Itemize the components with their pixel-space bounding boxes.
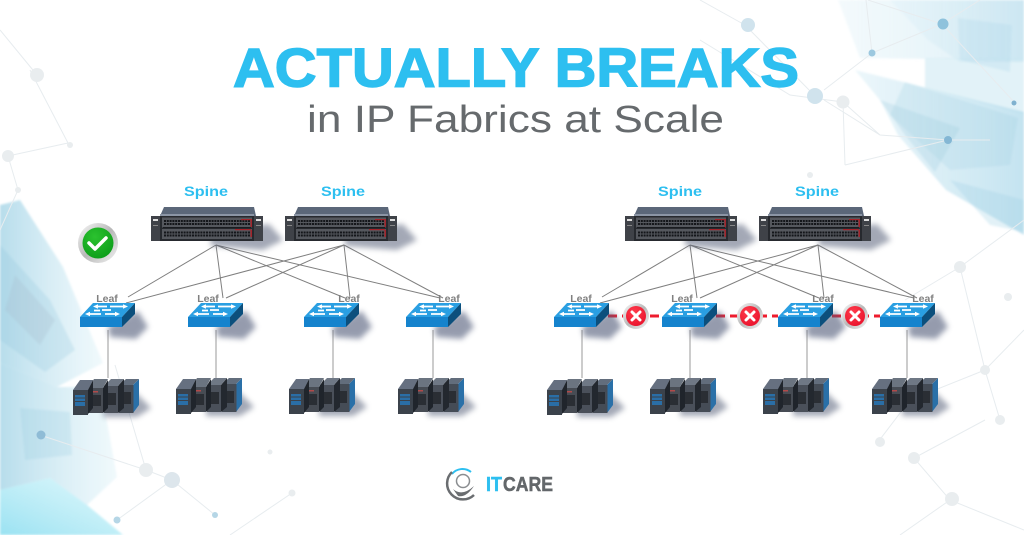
- spine labels: [184, 183, 365, 199]
- server racks: [547, 378, 950, 417]
- background: top-right geometric fan: [838, 0, 1024, 235]
- panel: failing fabric: [547, 183, 950, 417]
- panel: healthy fabric: [73, 183, 476, 417]
- spine labels: Spine: [321, 183, 365, 199]
- logo: ITCARE: [447, 469, 553, 499]
- leaf labels: [96, 293, 460, 305]
- icon: green check: [78, 223, 118, 263]
- leaf labels: Leaf: [96, 293, 118, 305]
- leaf switches: [80, 303, 474, 339]
- title: ACTUALLY BREAKS: [233, 36, 799, 98]
- leaf labels: Leaf: [570, 293, 592, 305]
- spine labels: Spine: [795, 183, 839, 199]
- leaf labels: Leaf: [912, 293, 934, 305]
- background: bottom-left geometric fan: [0, 200, 123, 535]
- leaf labels: Leaf: [671, 293, 693, 305]
- leaf labels: [570, 293, 934, 305]
- spine labels: [658, 183, 839, 199]
- fabric links: [108, 245, 443, 378]
- leaf labels: Leaf: [812, 293, 834, 305]
- fabric links: [582, 245, 917, 378]
- spine labels: Spine: [658, 183, 702, 199]
- broken east-west links: [608, 314, 880, 318]
- leaf labels: Leaf: [438, 293, 460, 305]
- leaf labels: Leaf: [197, 293, 219, 305]
- icons: red failure marks: [623, 303, 868, 329]
- logo: ITCARE: CARE: [503, 474, 553, 496]
- leaf switches: [554, 303, 948, 339]
- subtitle: in IP Fabrics at Scale: [307, 99, 724, 141]
- spine switches: [625, 207, 891, 250]
- spine labels: Spine: [184, 183, 228, 199]
- leaf labels: Leaf: [338, 293, 360, 305]
- logo: ITCARE: IT: [486, 474, 502, 496]
- spine switches: [151, 207, 417, 250]
- server racks: [73, 378, 476, 417]
